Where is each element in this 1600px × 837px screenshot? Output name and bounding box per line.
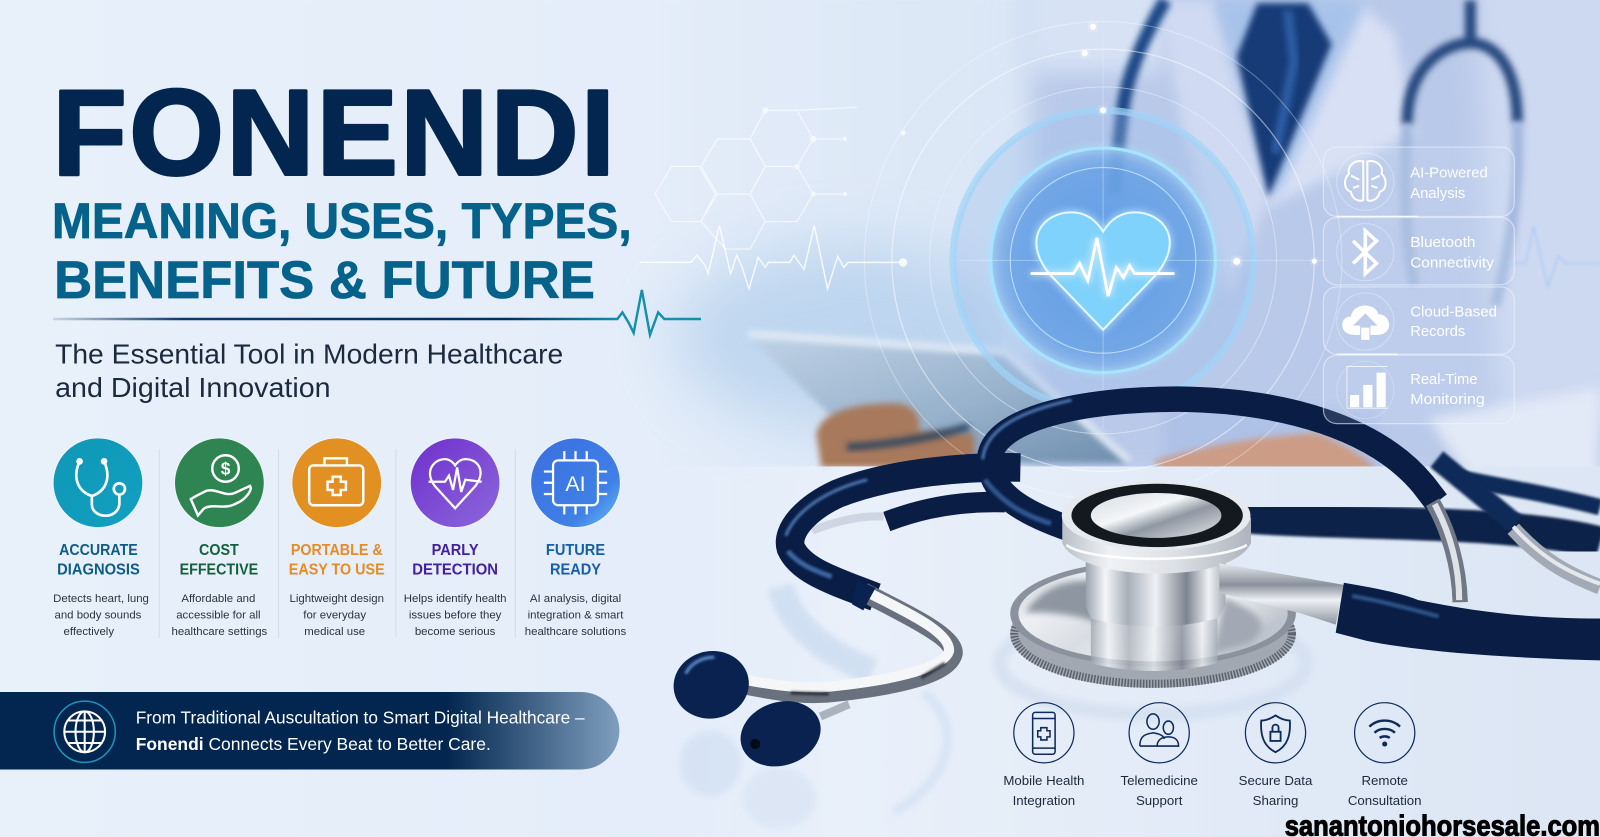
item: secure data: Sharing <box>1253 793 1298 808</box>
blurred tablet and hands <box>748 334 1378 470</box>
item: remote consultation <box>1348 703 1422 808</box>
feature cards <box>1323 147 1514 424</box>
rear tube <box>1224 515 1600 543</box>
benefit: cost effective: EFFECTIVE <box>180 562 258 579</box>
item: mobile health: Mobile Health <box>1003 773 1084 788</box>
left tube <box>790 467 1020 597</box>
chest piece stem <box>1091 612 1217 671</box>
benefit: cost effective: healthcare settings <box>172 626 268 638</box>
blurred doctor photo <box>673 0 1600 480</box>
icon: hand with coin <box>174 438 264 528</box>
benefit: future ready: READY <box>550 562 601 579</box>
icon: bar chart <box>1347 366 1388 408</box>
card: bluetooth <box>1323 217 1514 285</box>
title block: and Digital Innovation <box>55 372 331 403</box>
icon: brain <box>1345 161 1386 201</box>
item: remote consultation: Consultation <box>1348 793 1422 808</box>
benefit: early detection: issues before they <box>409 610 502 622</box>
card: cloud records: Records <box>1410 324 1465 340</box>
digital icons row <box>1003 703 1422 808</box>
card: ai analysis <box>1323 147 1514 216</box>
left inner tube <box>887 502 1005 522</box>
icon: ear tips <box>668 580 876 777</box>
item: secure data <box>1239 703 1313 808</box>
chest piece head <box>1062 517 1251 574</box>
benefit: cost effective: Affordable and <box>181 593 255 605</box>
benefit: portable: Lightweight design <box>289 593 384 605</box>
benefit: portable: for everyday <box>303 610 366 622</box>
far right blurred tube <box>1457 478 1600 507</box>
benefit: cost effective: accessible for all <box>176 610 261 622</box>
benefit: cost effective <box>172 438 268 638</box>
benefit: future ready <box>525 438 627 638</box>
hud rings <box>864 22 1342 499</box>
icon: cloud upload <box>1342 305 1389 340</box>
benefit: accurate diagnosis: effectively <box>64 626 114 638</box>
item: telemedicine: Support <box>1136 793 1183 808</box>
item: secure data: Secure Data <box>1239 773 1313 788</box>
item: remote consultation: Remote <box>1361 773 1408 788</box>
benefits row <box>53 438 627 638</box>
title rule and ecg <box>53 290 701 335</box>
connector <box>1219 563 1344 625</box>
chest piece disc <box>1010 580 1296 688</box>
benefit: future ready: FUTURE <box>546 542 605 559</box>
banner: Fonendi Connects Every Beat to Better Care. <box>136 734 491 754</box>
card: cloud records: Cloud-Based <box>1410 304 1497 320</box>
card: monitoring <box>1323 355 1514 424</box>
banner <box>0 692 619 770</box>
benefit: early detection: become serious <box>415 626 496 638</box>
benefit: future ready: healthcare solutions <box>525 626 627 638</box>
chrome headset tube <box>740 592 953 693</box>
benefit: accurate diagnosis: Detects heart, lung <box>53 593 149 605</box>
card: ai analysis: AI-Powered <box>1410 166 1488 182</box>
icon: shield lock <box>1245 703 1306 763</box>
benefit: cost effective: COST <box>199 542 239 559</box>
icon: wifi <box>1355 703 1415 763</box>
faint right ecg <box>1506 227 1600 287</box>
card: monitoring: Real-Time <box>1410 372 1478 388</box>
title: FONENDI <box>53 65 615 201</box>
icon: phone <box>1014 703 1074 763</box>
benefit: portable: medical use <box>304 626 365 638</box>
tail chrome tube <box>1437 459 1515 524</box>
icon: people <box>1129 703 1189 763</box>
hexagon network <box>655 107 906 249</box>
benefit: portable: EASY TO USE <box>289 562 385 579</box>
benefit: early detection: PARLY <box>432 542 479 559</box>
icon: stethoscope <box>53 438 143 528</box>
title block: BENEFITS & FUTURE <box>54 251 595 310</box>
item: telemedicine: Telemedicine <box>1121 773 1198 788</box>
benefit: future ready: AI analysis, digital <box>530 593 621 605</box>
card: bluetooth: Bluetooth <box>1410 235 1476 251</box>
icon: ai chip <box>531 438 620 528</box>
table surface <box>653 466 1600 837</box>
item: mobile health: Integration <box>1013 793 1075 808</box>
title block <box>52 65 701 403</box>
benefit: accurate diagnosis <box>53 438 149 638</box>
stethoscope <box>668 399 1600 829</box>
icon: medical case <box>292 438 382 528</box>
benefit: accurate diagnosis: and body sounds <box>55 610 142 622</box>
benefit: early detection: Helps identify health <box>404 593 506 605</box>
icon: globe <box>54 701 115 762</box>
card: monitoring: Monitoring <box>1410 392 1485 408</box>
icon: glowing heart <box>1031 212 1174 330</box>
main right tube <box>1336 583 1600 660</box>
tagline: The Essential Tool in Modern Healthcare <box>55 338 563 369</box>
banner text: From Traditional Auscultation to Smart Digital Healthcare – <box>136 708 585 728</box>
upper loop tube <box>990 399 1437 533</box>
subtitle: MEANING, USES, TYPES, <box>52 192 632 249</box>
benefit: portable <box>289 438 385 638</box>
benefit: early detection: DETECTION <box>412 562 498 579</box>
card: ai analysis: Analysis <box>1410 186 1465 202</box>
icon: ai chip: AI <box>565 472 586 496</box>
icon: heart pulse <box>410 438 500 528</box>
item: mobile health <box>1003 703 1084 808</box>
benefit: early detection <box>404 438 506 638</box>
white ecg trace <box>640 226 907 289</box>
item: telemedicine <box>1121 703 1198 808</box>
stethoscope reflections <box>680 587 1306 829</box>
icon: hand with coin: $ <box>221 459 231 479</box>
icon: bluetooth <box>1353 231 1377 274</box>
benefit: accurate diagnosis: ACCURATE <box>59 542 138 559</box>
benefit: future ready: integration & smart <box>528 610 624 622</box>
card: bluetooth: Connectivity <box>1410 255 1495 271</box>
benefit: accurate diagnosis: DIAGNOSIS <box>57 562 140 579</box>
card: cloud records <box>1323 287 1514 354</box>
benefit: portable: PORTABLE & <box>291 542 383 559</box>
